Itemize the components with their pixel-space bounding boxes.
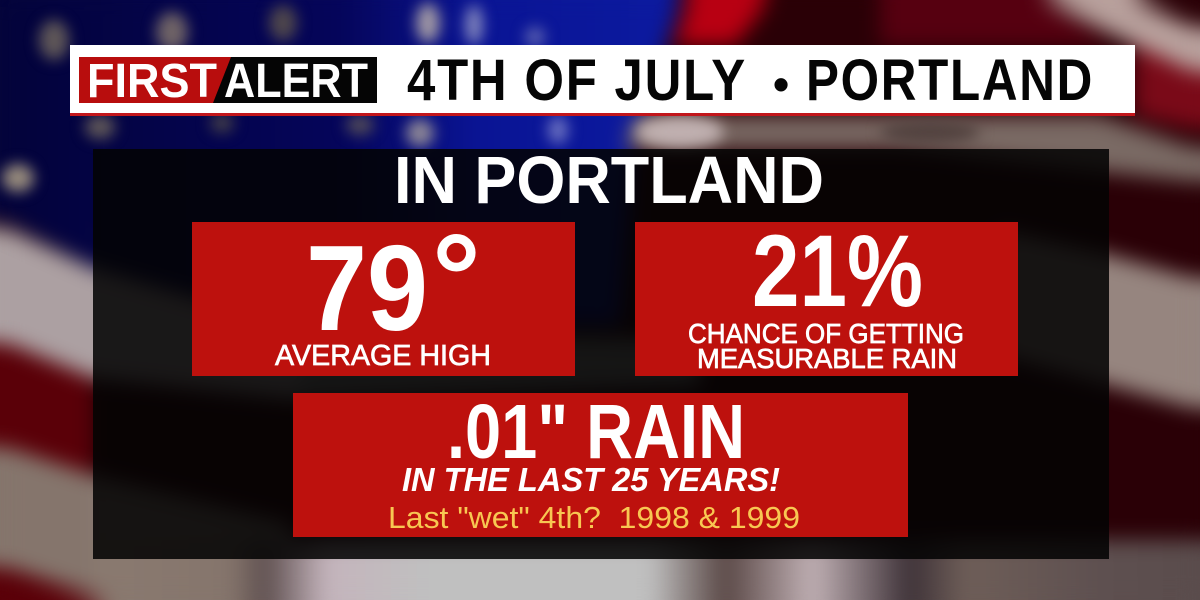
label: chance of measurable rain — [688, 318, 964, 374]
stat: 79 degrees: ° — [432, 209, 481, 345]
banner location: • — [773, 58, 789, 110]
translucent black central panel — [93, 149, 1109, 559]
First Alert logo: FIRST — [87, 55, 217, 108]
panel: chance of rain — [635, 214, 1018, 376]
subheading: last 25 years: IN THE LAST 25 YEARS! — [402, 461, 780, 498]
stat: .01 inch rain: .01" RAIN — [447, 389, 745, 475]
First Alert logo: ALERT — [224, 55, 368, 108]
heading: In Portland: IN PORTLAND — [394, 143, 824, 218]
header banner — [70, 45, 1135, 116]
panel: average high — [192, 209, 575, 376]
label: chance of measurable rain: CHANCE OF GETTING — [688, 318, 964, 349]
First Alert logo — [79, 55, 377, 108]
panel: rain in last 25 years — [293, 389, 908, 537]
stat: 21 percent: 21% — [752, 214, 923, 328]
label: average high: AVERAGE HIGH — [275, 340, 491, 372]
stat: 79 degrees: 79 — [306, 220, 428, 356]
banner title: 4TH OF JULY — [407, 48, 747, 113]
banner location: PORTLAND — [806, 48, 1094, 113]
label: chance of measurable rain: MEASURABLE RAIN — [697, 343, 957, 374]
note: last wet 4th: Last "wet" 4th? 1998 & 1999 — [388, 500, 800, 535]
